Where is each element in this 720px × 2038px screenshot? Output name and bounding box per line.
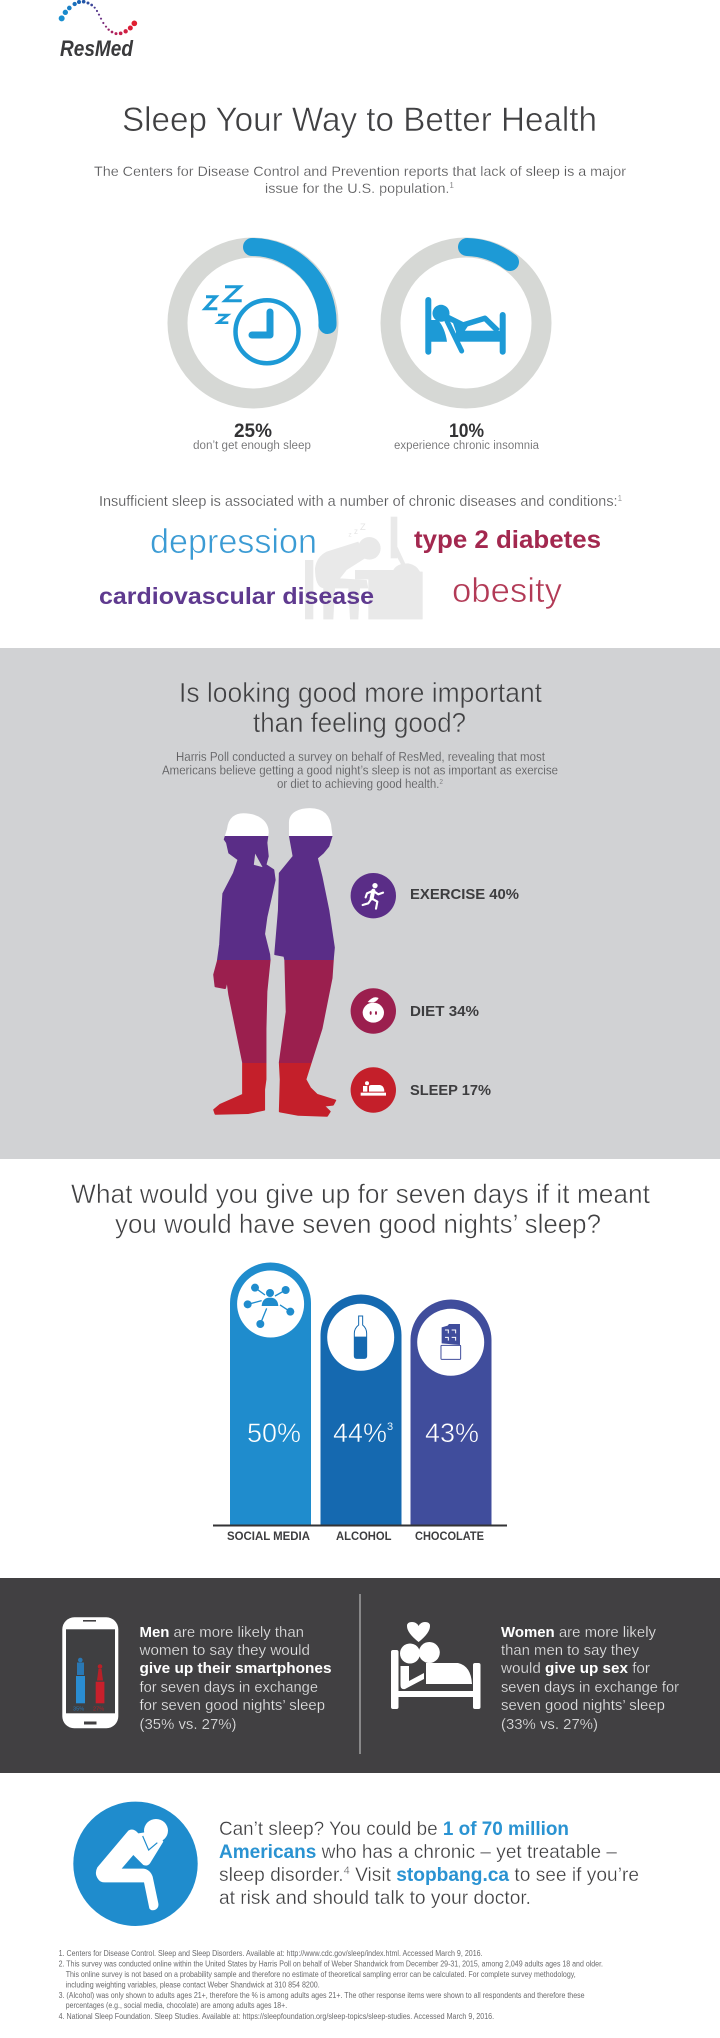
- footnotes: 4. National Sleep Foundation. Sleep Studies. Available at: https://sleepfoundation.org/sleep-topics/sleep-studies. Accessed March 9, 2016.: [59, 2012, 494, 2021]
- bar labels: [227, 1529, 484, 1543]
- call to action text: Americans who has a chronic – yet treatable –: [219, 1842, 617, 1863]
- call to action text: 4: [344, 1865, 350, 1877]
- icon: clock with Zs: [205, 287, 298, 363]
- intro text: 1: [449, 181, 455, 190]
- conditions: word cloud: cardiovascular disease: [99, 583, 374, 609]
- heading: [179, 677, 542, 738]
- icon: person unable to sleep: [73, 1802, 198, 1926]
- text: men: for seven days in exchange: [140, 1679, 318, 1696]
- panel: men vs women: [0, 1578, 720, 1773]
- intro text: issue for the U.S. population.: [265, 180, 445, 196]
- call to action text: stopbang.ca to see if you’re: [396, 1865, 638, 1886]
- footnotes: including weighting variables, please contact Weber Shandwick at 310 854 8200.: [66, 1981, 320, 1990]
- label: sleep: SLEEP 17%: [410, 1082, 491, 1099]
- logo: ResMed: ResMed: [60, 36, 133, 61]
- title: Sleep Your Way to Better Health: [122, 101, 597, 139]
- bar labels: ALCOHOL: [336, 1529, 392, 1543]
- footnotes: 1. Centers for Disease Control. Sleep and Sleep Disorders. Available at: http://www.cdc.gov/sleep/index.html. Accessed March 9, 2016.: [59, 1949, 483, 1958]
- bar chart: give up for seven days: [213, 1262, 507, 1543]
- icon: exercise: [351, 873, 396, 918]
- stat: 10%: [394, 420, 540, 452]
- footnotes: This online survey is not based on a probability sample and therefore no estimate of theoretical sampling error can be calculated. For complete survey methodology,: [66, 1970, 576, 1979]
- call to action text: Visit: [350, 1865, 396, 1886]
- survey text: Americans believe getting a good night’s sleep is not as important as exercise: [162, 764, 558, 778]
- bar: alcohol 44%: 3: [387, 1421, 393, 1433]
- heading: Is looking good more important: [179, 677, 542, 708]
- icon: person asleep at desk (watermark): [305, 517, 423, 619]
- footnotes: 3. (Alcohol) was only shown to adults ages 21+, therefore the % is among adults ages 21+. The other response items were shown to all respondents and therefore these: [59, 1991, 585, 2000]
- bar: alcohol 44%: [320, 1295, 402, 1525]
- stat: 10%: experience chronic insomnia: [394, 440, 540, 452]
- donut chart: 10% experience chronic insomnia: [390, 247, 542, 398]
- text: women: would give up sex for: [500, 1660, 650, 1677]
- heading: give up for seven days: What would you give up for seven days if it meant: [71, 1179, 650, 1209]
- icon: sleep: [351, 1067, 396, 1113]
- label: diet: DIET 34%: [410, 1003, 479, 1020]
- silhouette: woman and man back to back: [214, 809, 335, 1116]
- call to action text: at risk and should talk to your doctor.: [219, 1888, 531, 1909]
- survey text: or diet to achieving good health.: [277, 777, 454, 791]
- heading: than feeling good?: [253, 707, 466, 738]
- conditions intro text: 1: [618, 494, 623, 503]
- icon: person asleep at desk (watermark): Z: [360, 522, 366, 532]
- stat: 25%: don’t get enough sleep: [193, 440, 311, 452]
- icon: diet: [351, 988, 396, 1034]
- text: men: for seven good nights’ sleep: [140, 1697, 325, 1714]
- heading: give up for seven days: you would have seven good nights’ sleep?: [115, 1209, 601, 1239]
- text: men: give up their smartphones: [140, 1660, 332, 1677]
- logo: ResMed: [59, 0, 137, 61]
- conditions: word cloud: depression: [150, 523, 317, 561]
- icon: person asleep at desk (watermark): z: [348, 532, 352, 539]
- label: exercise: EXERCISE 40%: [410, 886, 519, 903]
- text: women: [500, 1624, 679, 1733]
- bar: alcohol 44%: 44%: [333, 1418, 387, 1448]
- icon: smartphone with bars: [62, 1617, 118, 1728]
- icon: couple in bed with heart: [391, 1622, 480, 1709]
- bar: chocolate 43%: [410, 1299, 492, 1525]
- icon: bottle: [354, 1316, 367, 1358]
- stat: 25%: [193, 420, 311, 452]
- text: women: Women are more likely: [501, 1624, 656, 1641]
- icon: person awake in bed: [428, 300, 503, 352]
- bar labels: CHOCOLATE: [415, 1529, 484, 1543]
- call to action text: sleep disorder.: [219, 1865, 343, 1886]
- text: men: Men are more likely than: [140, 1624, 304, 1641]
- text: men: (35% vs. 27%): [140, 1716, 236, 1733]
- text: men: [138, 1624, 332, 1733]
- intro text: [94, 163, 626, 196]
- icon: smartphone with bars: 27%: [93, 1707, 104, 1713]
- call to action text: Can’t sleep? You could be 1 of 70 million: [219, 1819, 569, 1840]
- call to action text: [219, 1819, 639, 1909]
- icon: chocolate bar: [441, 1324, 461, 1359]
- intro text: The Centers for Disease Control and Prevention reports that lack of sleep is a major: [94, 163, 626, 179]
- footnotes: [59, 1949, 603, 2021]
- stat: 25%: 25%: [234, 420, 272, 442]
- conditions: word cloud: type 2 diabetes: [414, 526, 601, 554]
- bar: social media 50%: [230, 1262, 311, 1525]
- survey text: 2: [439, 779, 443, 786]
- bar labels: SOCIAL MEDIA: [227, 1529, 310, 1543]
- donut chart: 25% don't get enough sleep: [178, 247, 328, 398]
- bar: chocolate 43%: 43%: [425, 1418, 479, 1448]
- survey text: [162, 750, 558, 791]
- survey text: Harris Poll conducted a survey on behalf of ResMed, revealing that most: [176, 750, 545, 764]
- text: women: seven good nights’ sleep: [501, 1697, 665, 1714]
- text: women: (33% vs. 27%): [501, 1716, 598, 1733]
- conditions intro text: Insufficient sleep is associated with a number of chronic diseases and conditions:: [99, 494, 619, 510]
- conditions: word cloud: obesity: [452, 572, 562, 610]
- text: women: than men to say they: [501, 1642, 639, 1659]
- bar: social media 50%: 50%: [247, 1418, 301, 1448]
- panel: looking good vs feeling good: [0, 648, 720, 1159]
- icon: smartphone with bars: 35%: [73, 1707, 84, 1713]
- heading: give up for seven days: [71, 1179, 650, 1239]
- footnotes: 2. This survey was conducted online within the United States by Harris Poll on behalf of Weber Shandwick from December 29-31, 2015, among 2,049 adults ages 18 and older.: [59, 1960, 603, 1969]
- conditions: word cloud: [99, 523, 601, 610]
- text: men: women to say they would: [138, 1642, 310, 1659]
- icon: social network: [244, 1284, 294, 1328]
- text: women: seven days in exchange for: [501, 1679, 679, 1696]
- icon: person asleep at desk (watermark): z: [354, 527, 358, 536]
- footnotes: percentages (e.g., social media, chocolate) are among adults ages 18+.: [66, 2001, 287, 2010]
- stat: 10%: 10%: [449, 420, 484, 442]
